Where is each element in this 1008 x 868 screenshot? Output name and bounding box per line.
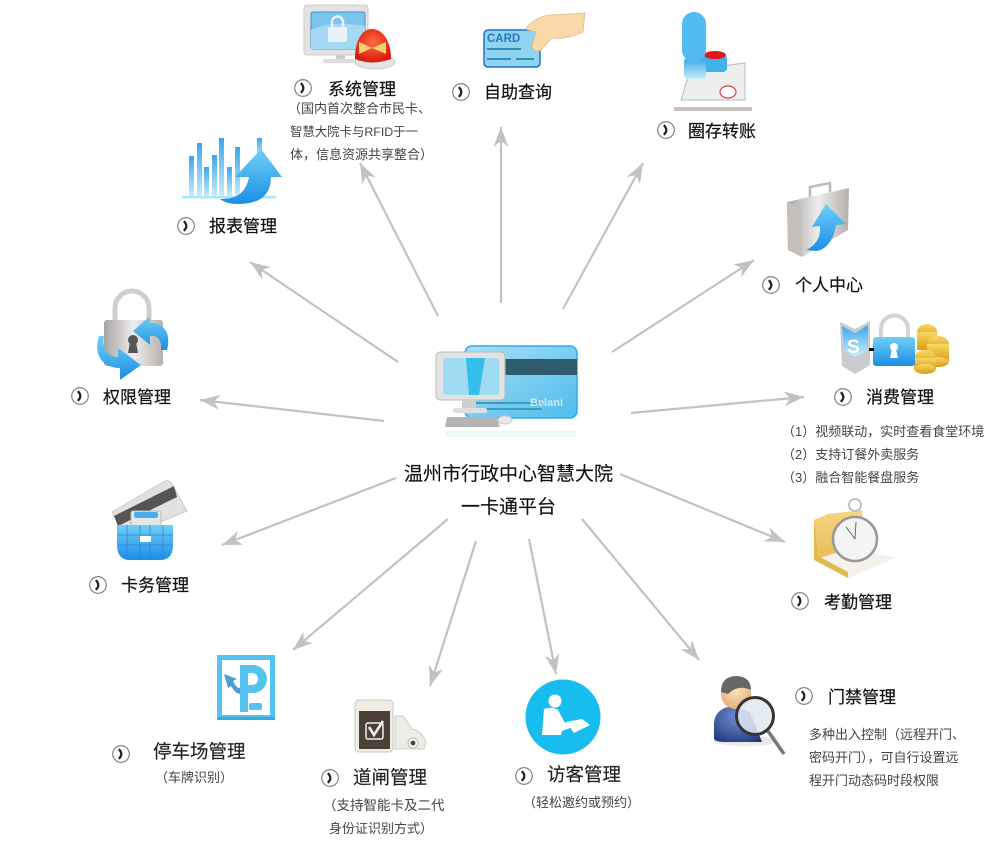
panel: 门禁管理 <box>713 676 965 788</box>
description: 身份证识别方式） <box>329 821 433 836</box>
heading: 报表管理 <box>209 217 277 236</box>
heading: 道闸管理 <box>353 767 427 788</box>
bullet <box>90 577 106 593</box>
panel: 报表管理 <box>178 138 282 236</box>
arrow: to 门禁管理 <box>582 519 699 660</box>
arrow: to 圈存转账 <box>563 163 643 309</box>
icon: computer and card <box>436 346 577 437</box>
panel: 消费管理 <box>782 316 984 485</box>
icon: person with magnifier <box>713 676 784 754</box>
bullet <box>516 768 532 784</box>
title: platform name: 一卡通平台 <box>461 496 556 518</box>
icon: shield, lock and coins <box>840 316 949 374</box>
arrow: to 自助查询 <box>500 127 502 303</box>
panel: 系统管理 <box>288 5 433 162</box>
heading: 个人中心 <box>795 276 863 295</box>
panel: central platform <box>404 346 613 518</box>
description <box>782 424 984 485</box>
bullet <box>796 688 812 704</box>
title: platform name: 温州市行政中心智慧大院 <box>404 463 613 485</box>
description: （3）融合智能餐盘服务 <box>782 470 919 485</box>
bullet <box>763 277 779 293</box>
bullet <box>295 80 311 96</box>
description: 密码开门），可自行设置远 <box>809 750 959 765</box>
description: 体，信息资源共享整合） <box>290 147 433 162</box>
heading: 圈存转账 <box>688 122 756 141</box>
description: （2）支持订餐外卖服务 <box>782 447 919 462</box>
icon: monitor with alarm <box>304 5 395 69</box>
icon: bar chart with up arrow <box>182 138 282 204</box>
arrow: to 道闸管理 <box>430 541 476 686</box>
bullet <box>835 389 851 405</box>
panel: 道闸管理 <box>322 700 445 836</box>
panel: 个人中心 <box>763 183 863 295</box>
icon: shield, lock and coins: S <box>847 337 860 358</box>
description <box>809 727 965 788</box>
description: 多种出入控制（远程开门、 <box>809 727 965 742</box>
bullet <box>453 84 469 100</box>
bullet <box>178 218 194 234</box>
icon: parking sign <box>217 658 275 720</box>
description: （轻松邀约或预约） <box>523 795 640 810</box>
arrow: to 停车场管理 <box>293 519 448 650</box>
title: platform name <box>404 463 613 518</box>
bullet <box>72 388 88 404</box>
description: 程开门动态码时段权限 <box>809 773 939 788</box>
description: （1）视频联动，实时查看食堂环境 <box>782 424 984 439</box>
icon: stamp and ink pad <box>674 12 752 111</box>
heading: 权限管理 <box>103 388 171 407</box>
description <box>288 101 433 162</box>
heading: 消费管理 <box>866 388 934 407</box>
heading: 停车场管理 <box>153 741 246 762</box>
heading: 卡务管理 <box>121 576 189 595</box>
description: （车牌识别） <box>155 770 233 785</box>
icon: computer and card: Belani <box>530 397 563 409</box>
icon: briefcase with arrow <box>787 183 849 257</box>
arrow: to 卡务管理 <box>222 478 396 545</box>
bullet <box>792 593 808 609</box>
icon: visitor signing in <box>526 680 600 754</box>
panel: 权限管理 <box>72 291 171 407</box>
icon: padlock with arrows <box>97 291 168 380</box>
bullet <box>658 122 674 138</box>
heading: 系统管理 <box>328 80 396 99</box>
panel: 考勤管理 <box>792 499 896 612</box>
arrow: to 个人中心 <box>612 260 754 352</box>
panel: 停车场管理 <box>113 658 275 785</box>
arrow: to 系统管理 <box>360 163 438 316</box>
bullet <box>322 770 338 786</box>
icon: hand holding card: CARD <box>487 33 520 45</box>
description: 智慧大院卡与RFID于一 <box>290 124 418 139</box>
arrow: to 消费管理 <box>631 397 804 413</box>
heading: 自助查询 <box>484 83 552 102</box>
description: （支持智能卡及二代 <box>323 798 445 813</box>
panel: 自助查询 <box>453 13 585 102</box>
icon: checklist and car <box>355 700 426 752</box>
bullet <box>113 746 129 762</box>
heading: 门禁管理 <box>828 688 896 707</box>
heading: 访客管理 <box>547 764 621 785</box>
arrow: to 报表管理 <box>250 262 398 362</box>
heading: 考勤管理 <box>824 593 892 612</box>
panel: 访客管理 <box>516 680 640 810</box>
icon: card in basket <box>112 481 187 560</box>
arrow: to 权限管理 <box>200 400 384 421</box>
description: （国内首次整合市民卡、 <box>288 101 431 116</box>
description <box>323 798 445 836</box>
arrow: to 访客管理 <box>529 539 556 674</box>
icon: folder and stopwatch <box>814 499 896 578</box>
panel: 圈存转账 <box>658 12 756 141</box>
arrow: to 考勤管理 <box>620 474 785 542</box>
panel: 卡务管理 <box>90 481 189 595</box>
